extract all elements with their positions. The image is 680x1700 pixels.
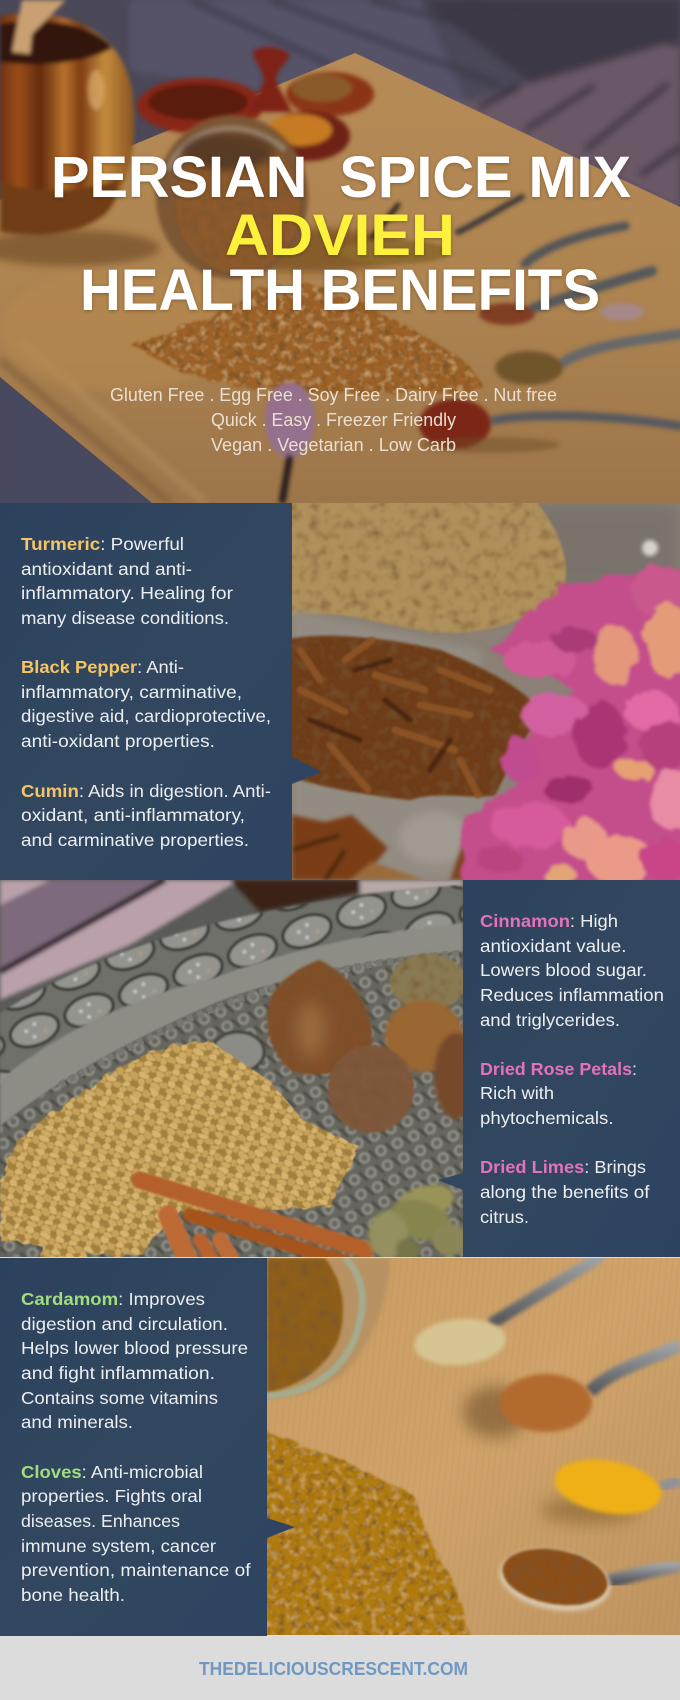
spice pile	[260, 1430, 472, 1640]
text: cardamom: and fight inflammation.	[21, 1363, 215, 1383]
text: dried limes: Dried Limes: Brings	[480, 1157, 646, 1177]
text: dried limes	[480, 1157, 650, 1227]
panel: turmeric, black pepper, cumin	[0, 503, 322, 880]
text: black pepper: digestive aid, cardioprotective,	[21, 706, 271, 726]
coriander seeds	[0, 1040, 360, 1262]
text: dried limes: along the benefits of	[480, 1182, 650, 1202]
photo: ground spices in spoons on wood	[260, 1258, 680, 1640]
text: black pepper: anti-oxidant properties.	[21, 731, 215, 751]
text: cloves: bone health.	[21, 1585, 125, 1605]
dietary tags: Gluten Free . Egg Free . Soy Free . Dairy Free . Nut free	[110, 385, 557, 405]
text: cloves: diseases. Enhances	[21, 1511, 180, 1531]
tray center	[0, 952, 463, 1257]
text: cumin	[21, 781, 271, 850]
text: cinnamon: Reduces inflammation	[480, 985, 664, 1005]
spoon: turmeric	[540, 1452, 680, 1524]
dietary tags	[110, 385, 557, 455]
text: turmeric: Turmeric : Powerful	[21, 534, 184, 554]
text: cardamom: and minerals.	[21, 1412, 133, 1432]
text: cinnamon: antioxidant value.	[480, 936, 626, 956]
title line: Advieh: ADVIEH	[225, 203, 455, 268]
text: cumin: Cumin: Aids in digestion. Anti-	[21, 781, 271, 801]
text: turmeric: many disease conditions.	[21, 608, 229, 628]
cumin pile	[280, 500, 566, 633]
text: cinnamon	[480, 911, 664, 1030]
text: black pepper: inflammatory, carminative,	[21, 682, 242, 702]
spoons	[265, 197, 680, 503]
wooden table	[0, 880, 463, 1000]
text: cloves: Cloves: Anti-microbial	[21, 1462, 203, 1482]
cloves	[285, 636, 540, 800]
text: cumin: and carminative properties.	[21, 830, 249, 850]
text: dried rose petals: phytochemicals.	[480, 1108, 614, 1128]
text: cloves	[21, 1462, 251, 1605]
cutting board	[0, 53, 680, 503]
text: cardamom: Helps lower blood pressure	[21, 1338, 248, 1358]
panel: cardamom and cloves	[0, 1258, 295, 1637]
text: cumin: oxidant, anti-inflammatory,	[21, 805, 245, 825]
silver tray	[292, 610, 490, 880]
footer: THEDELICIOUSCRESCENT.COM	[199, 1659, 468, 1679]
jar of ground spice	[267, 1258, 390, 1398]
text: cloves: prevention, maintenance of	[21, 1560, 251, 1580]
text: dried rose petals	[480, 1059, 637, 1128]
footer	[0, 1636, 680, 1700]
text: cinnamon: and triglycerides.	[480, 1010, 620, 1030]
text: cinnamon: Lowers blood sugar.	[480, 960, 647, 980]
hero photo: spices on a wooden board	[0, 0, 680, 503]
spoon: cinnamon powder	[463, 1345, 680, 1438]
title line: Persian Spice Mix: PERSIAN SPICE MIX	[51, 145, 631, 210]
text: cardamom: Cardamom : Improves	[21, 1289, 205, 1309]
mortar	[0, 0, 134, 235]
text: turmeric: antioxidant and anti-	[21, 559, 192, 579]
panel: cinnamon, rose petals, limes	[438, 880, 680, 1257]
glass jar of spice	[156, 115, 308, 279]
star anise	[292, 812, 466, 880]
text: cardamom: Contains some vitamins	[21, 1388, 218, 1408]
cardamom pods	[366, 1183, 463, 1257]
dietary tags: Quick . Easy . Freezer Friendly	[211, 410, 456, 430]
title	[51, 145, 631, 323]
title line: Health Benefits: HEALTH BENEFITS	[80, 258, 600, 323]
photo: tray with coriander, dried limes, cinnamon	[0, 880, 478, 1265]
text: cloves: properties. Fights oral	[21, 1486, 202, 1506]
spoon: pale spice	[412, 1258, 598, 1369]
text: black pepper	[21, 657, 271, 751]
text: turmeric: inflammatory. Healing for	[21, 583, 233, 603]
cumin heap behind limes	[390, 954, 466, 1010]
photo: cumin, cloves, rose petals	[280, 500, 680, 900]
panel: hero photo and title	[0, 0, 680, 503]
text: cloves: immune system, cancer	[21, 1536, 216, 1556]
cinnamon sticks	[140, 1180, 366, 1265]
text: cardamom: digestion and circulation.	[21, 1314, 228, 1334]
tray rim band	[0, 885, 463, 1085]
spoon: brown spice	[495, 1541, 680, 1619]
text: black pepper: Black Pepper : Anti-	[21, 657, 184, 677]
red bowls	[137, 47, 374, 161]
text: turmeric	[21, 534, 233, 628]
text: dried limes: citrus.	[480, 1207, 529, 1227]
rose petals	[462, 560, 680, 900]
spice pile	[132, 286, 482, 393]
text: dried rose petals: Dried Rose Petals:	[480, 1059, 637, 1079]
text: dried rose petals: Rich with	[480, 1083, 554, 1103]
text: cinnamon: Cinnamon : High	[480, 911, 618, 931]
text: cardamom	[21, 1289, 248, 1432]
dietary tags: Vegan . Vegetarian . Low Carb	[211, 435, 456, 455]
dried limes	[267, 960, 478, 1133]
